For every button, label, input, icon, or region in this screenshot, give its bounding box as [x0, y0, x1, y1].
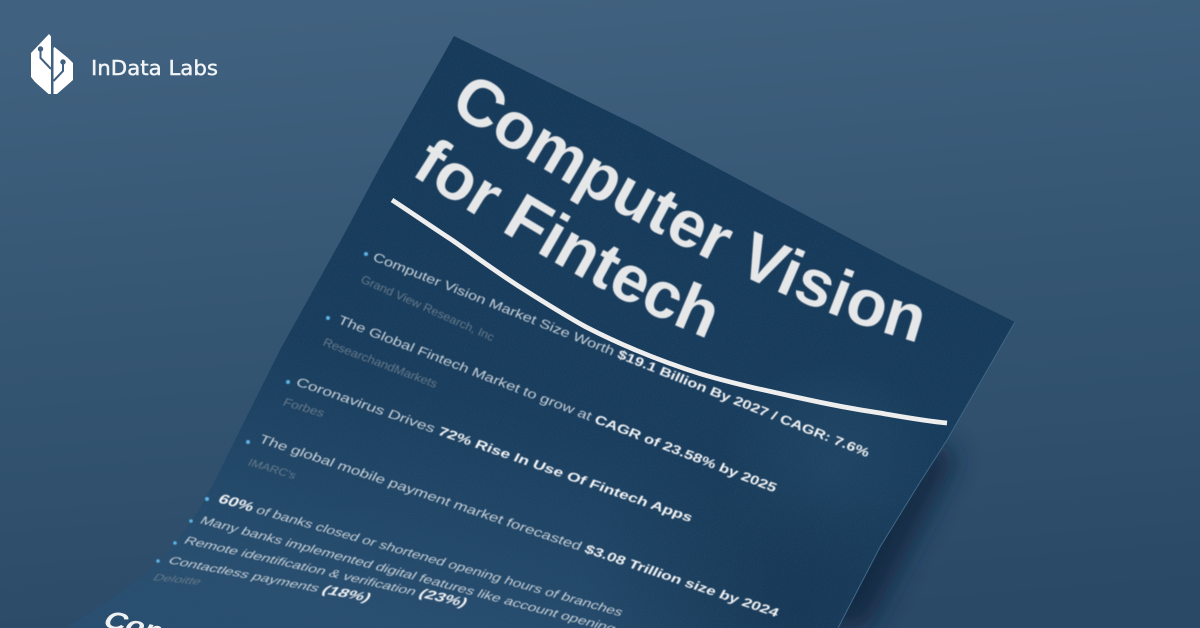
item: mobile payment market: The global mobile payment market forecasted $3.08 Trillion size by 2024: [257, 432, 783, 620]
source: ResearchandMarkets: ResearchandMarkets: [321, 335, 440, 391]
source: Forbes: Forbes: [281, 395, 327, 420]
source: Grand View Research: Grand View Research, Inc: [359, 272, 497, 344]
paper drop shadow: [790, 440, 958, 628]
title underline: [392, 200, 947, 423]
item: digital features: Many banks implemented digital features like account opening: [197, 514, 619, 628]
bullet list: [150, 249, 873, 628]
title: for Fintech: [414, 139, 716, 338]
item: computer vision market size: Computer Vision Market Size Worth $19.1 Billion By 2027 / CAGR: 7.6%: [371, 249, 873, 460]
item: contactless payments: Contactless payments (18%): [165, 554, 375, 605]
item: coronavirus fintech apps: Coronavirus Drives 72% Rise In Use Of Fintech Apps: [294, 374, 696, 525]
item: remote identification: Remote identification & verification (23%): [181, 534, 471, 610]
icon: logo hexagon: [31, 34, 73, 94]
item: banks closed: 60% of banks closed or shortened opening hours of branches: [215, 492, 626, 620]
logo wordmark: InData Labs: [91, 56, 218, 80]
logo: InData Labs: [31, 34, 218, 94]
source: IMARC: IMARC's: [246, 457, 299, 482]
paper sheet: [60, 30, 1020, 628]
source: Deloitte: Deloitte: [150, 572, 205, 587]
title: Computer Vision: [457, 78, 923, 342]
item: global fintech market: The Global Fintech Market to grow at CAGR of 23.58% by 2025: [336, 312, 779, 495]
